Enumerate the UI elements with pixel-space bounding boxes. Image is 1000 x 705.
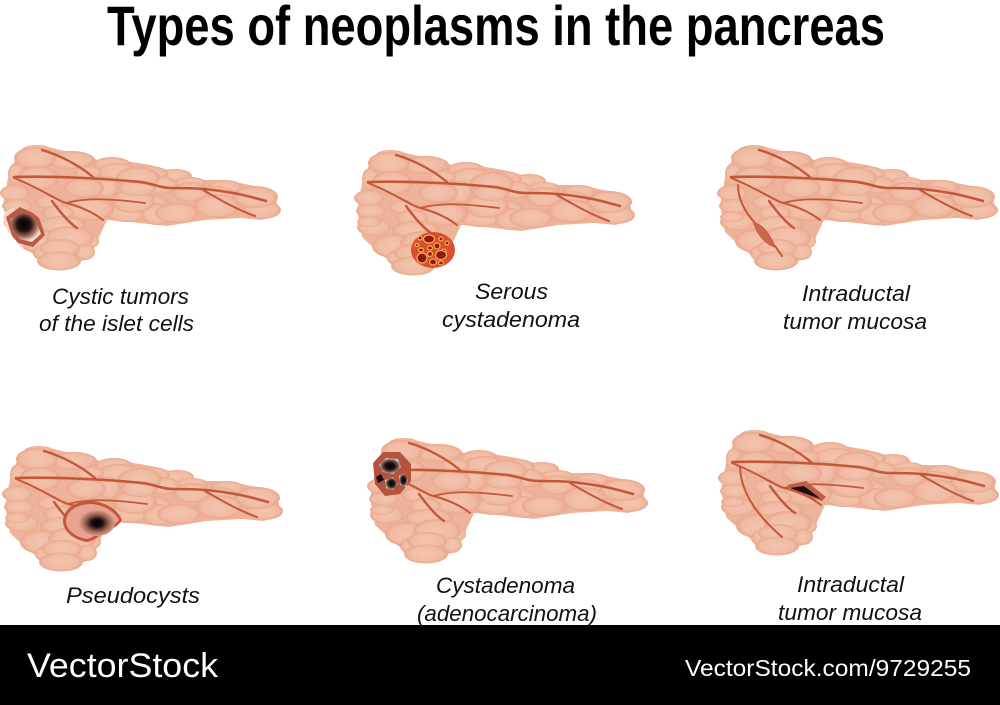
caption: Intraductal (802, 281, 911, 306)
panel: cystic tumors of the islet cells (0, 145, 281, 336)
caption: Intraductal (797, 572, 905, 597)
icon: duct lesion (787, 481, 826, 501)
caption: tumor mucosa (783, 309, 927, 334)
panel: intraductal tumor mucosa bottom (718, 430, 999, 625)
watermark logo text: VectorStock (27, 647, 219, 685)
caption: Serous (475, 279, 548, 304)
caption: Pseudocysts (66, 583, 200, 608)
panel: pseudocysts (2, 446, 283, 608)
icon: extra duct (740, 467, 782, 537)
caption: Cystadenoma (436, 573, 575, 598)
icon: multilocular cyst (373, 452, 411, 496)
icon: pseudocyst (63, 501, 122, 542)
icon: duct spindle (738, 185, 782, 256)
watermark url: VectorStock.com/9729255 (685, 655, 971, 681)
icon: serous cyst (411, 232, 455, 268)
caption: Cystic tumors (52, 284, 189, 309)
panel: serous cystadenoma (354, 150, 635, 332)
caption: (adenocarcinoma) (417, 601, 597, 626)
caption: cystadenoma (442, 307, 580, 332)
caption: of the islet cells (39, 311, 194, 336)
panel: cystadenoma (367, 438, 648, 626)
icon: cystic islet tumor (0, 207, 45, 250)
panel: intraductal tumor mucosa top (717, 145, 998, 334)
footer bar (0, 625, 1000, 705)
caption: tumor mucosa (778, 600, 922, 625)
